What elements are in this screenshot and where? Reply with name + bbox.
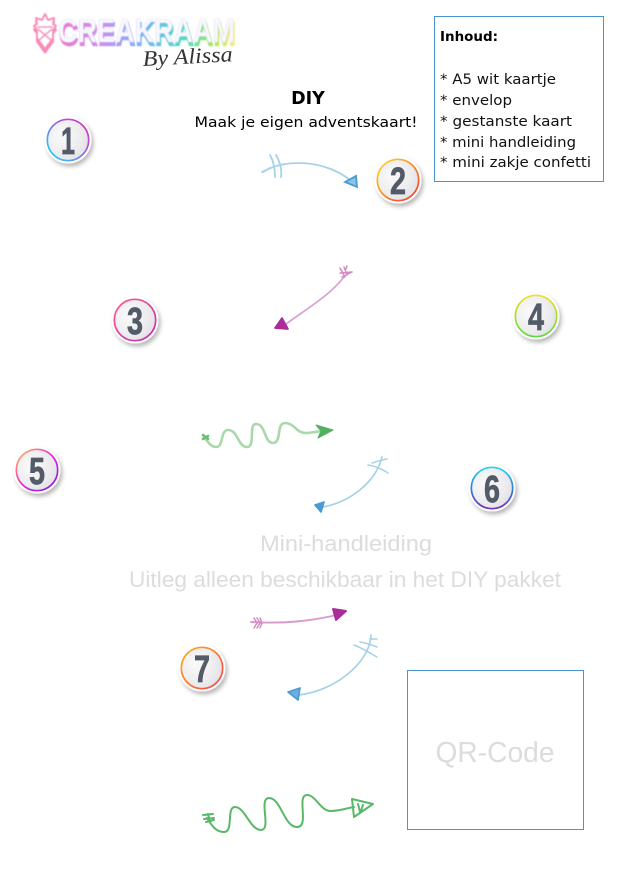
badge 4 xyxy=(512,292,560,340)
arrow: blue 5 to 6 xyxy=(315,457,388,512)
contents list xyxy=(440,72,591,171)
contents list: * mini handleiding xyxy=(440,135,576,151)
badge 4: 4 xyxy=(528,297,544,339)
arrow: magenta 6 to 7 xyxy=(251,609,346,628)
badge 1 xyxy=(44,116,92,164)
logo wordmark: CREAKRAAM xyxy=(58,12,235,49)
badge 3 xyxy=(112,296,158,344)
logo signature: By Alissa xyxy=(142,41,233,71)
badge 6 xyxy=(468,464,516,512)
watermark: uitleg: Uitleg alleen beschikbaar in het DIY pakket xyxy=(129,567,561,592)
logo: Creakraam by Alissa xyxy=(34,12,236,71)
contents list: * mini zakje confetti xyxy=(440,155,591,171)
contents box xyxy=(434,16,604,182)
badge 5: 5 xyxy=(29,451,45,493)
badge 3: 3 xyxy=(127,301,143,343)
badge 2 xyxy=(374,156,422,204)
badge 1: 1 xyxy=(61,121,75,163)
QR code label: QR-Code xyxy=(436,737,554,769)
arrow: green squiggle bottom xyxy=(203,795,373,832)
subtitle: Maak je eigen adventskaart! xyxy=(194,115,418,131)
contents heading: Inhoud: xyxy=(440,29,498,45)
title: DIY xyxy=(291,89,325,109)
logo icon xyxy=(34,14,56,52)
badge 7: 7 xyxy=(194,649,210,691)
QR code placeholder xyxy=(408,670,584,830)
badge 6: 6 xyxy=(484,469,500,511)
badge 2: 2 xyxy=(390,161,406,203)
watermark: mini-handleiding: Mini-handleiding xyxy=(260,531,432,556)
contents list: * envelop xyxy=(440,93,512,109)
badge 7 xyxy=(178,644,226,692)
contents list: * gestanste kaart xyxy=(440,114,572,130)
arrow: magenta 2 to 3 xyxy=(275,266,352,329)
arrow: blue 1 to 2 xyxy=(262,155,357,187)
badge 5 xyxy=(14,446,60,494)
contents list: * A5 wit kaartje xyxy=(440,72,556,88)
logo wordmark shadow: CREAKRAAM xyxy=(59,16,236,52)
arrow: blue 7 xyxy=(288,635,377,700)
arrow: green squiggle 4 to 5 xyxy=(203,423,333,447)
